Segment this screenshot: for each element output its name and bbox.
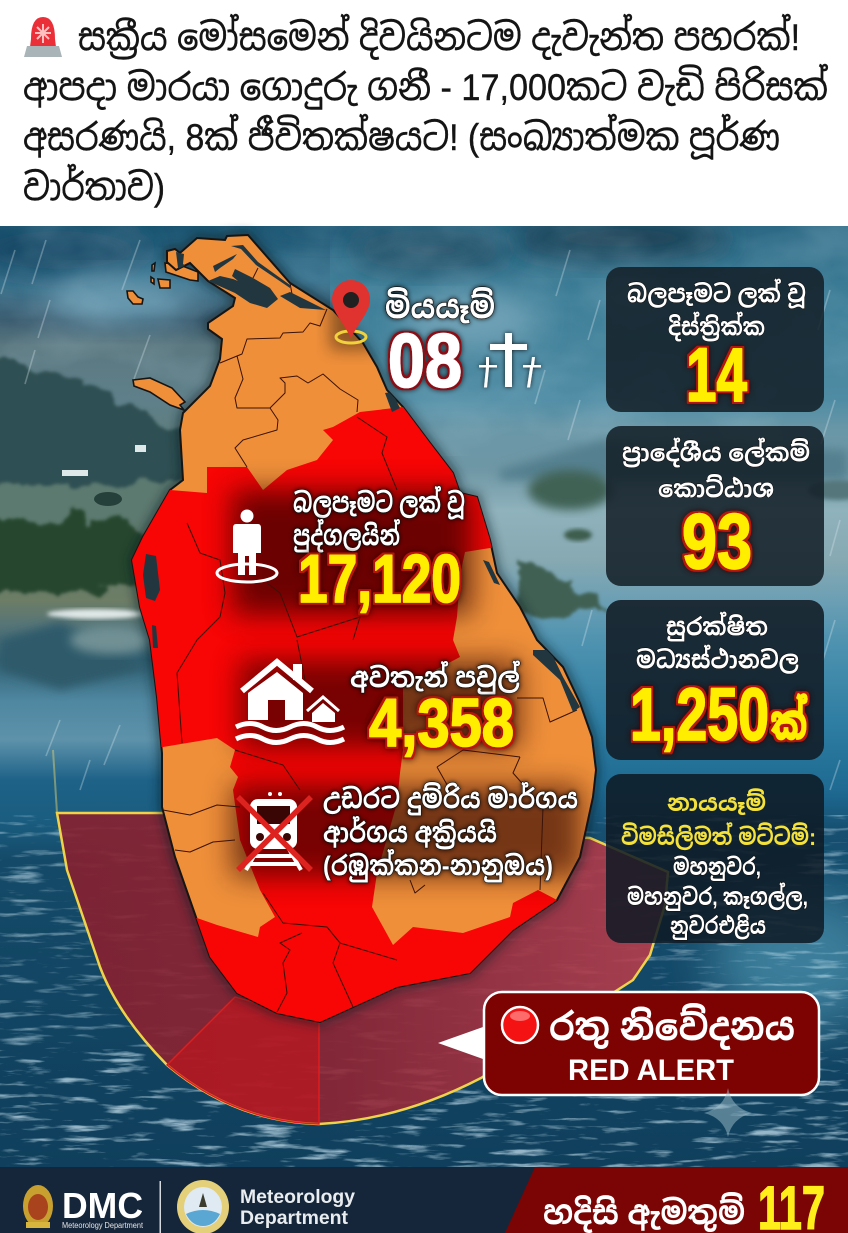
- footer bar: [0, 1167, 848, 1233]
- panel: landslide warning: නුවරඑළිය: [670, 913, 766, 940]
- island base: [132, 235, 596, 1022]
- footer red section: [505, 1167, 848, 1233]
- outlying islands and Mannar spit: [127, 263, 198, 410]
- storm background photo: [0, 216, 848, 1167]
- map shadow: [132, 235, 596, 1022]
- footer bar: Department: [240, 1208, 349, 1229]
- emergency label: හදිසි ඇමතුම්: [543, 1191, 745, 1233]
- icon: crosses: [479, 333, 541, 388]
- trees left: [0, 505, 144, 600]
- panel: landslide warning: [606, 774, 824, 943]
- panel number: 14: [686, 333, 747, 418]
- map of Sri Lanka: [126, 224, 606, 1032]
- warning districts: මහනුවර,: [673, 854, 761, 881]
- icon: location pin: [332, 280, 370, 343]
- callout heading: රතු නිවේදනය: [549, 1002, 795, 1050]
- headline: වාර්තාව): [23, 163, 165, 208]
- DMC wordmark: DMC: [62, 1185, 143, 1226]
- panel: landslide warning: විමසිලිමත් මට්ටම්:: [621, 822, 816, 850]
- affected people label: බලපෑමට ලක් වූ: [293, 485, 465, 519]
- headline: අසරණයි, 8ක් ජීවිතක්ෂයට! (සංඛ්‍යාත්මක පූර්ණ: [23, 113, 780, 160]
- highlighted sector: [167, 997, 319, 1124]
- headline: [23, 13, 829, 208]
- affected people group: පුද්ගලයින්: [293, 518, 400, 552]
- panel: divisional secretariats: කොට්ඨාශ: [658, 473, 774, 503]
- icon: siren: [24, 17, 62, 57]
- lagoons: [143, 245, 580, 712]
- deaths group: [332, 280, 541, 404]
- affected people number: 17,120: [298, 541, 461, 617]
- sea waves: [0, 815, 848, 1167]
- displaced families group: [236, 660, 521, 761]
- warning heading: නායයෑම්: [667, 788, 766, 816]
- panel number: 1,250: [630, 673, 769, 756]
- panel: safe centres: [606, 600, 824, 760]
- Meteorology Department wordmark: Meteorology: [240, 1187, 355, 1208]
- logo: DMC emblem: [23, 1185, 53, 1228]
- logo: Meteorology seal: [177, 1180, 229, 1233]
- icon: flooded house: [236, 662, 344, 742]
- callout subheading: RED ALERT: [568, 1054, 734, 1087]
- displaced families label: අවතැන් පවුල්: [350, 660, 521, 694]
- panel heading: ප්‍රාදේශීය ලේකම්: [622, 437, 810, 467]
- deaths label: මියයෑම්: [385, 286, 495, 325]
- rail line text: උඩරට දුම්රිය මාර්ගය: [323, 781, 578, 815]
- panel: safe centres: මධ්‍යස්ථානවල: [636, 644, 799, 674]
- rail line group: (රඹුක්කන-නානුඔය): [323, 848, 553, 882]
- panel: affected districts: දිස්ත්‍රික්ක: [668, 311, 765, 341]
- panel: affected districts: [606, 267, 824, 418]
- rail line group: ආර්ගය අක්‍රියයි: [323, 815, 497, 849]
- red districts: [100, 245, 640, 1060]
- deaths number: 08: [388, 319, 462, 404]
- rail line group: [238, 781, 578, 882]
- district borders: [163, 268, 577, 1012]
- panel: landslide warning: මහනුවර, කෑගල්ල,: [627, 882, 808, 911]
- panel heading: බලපෑමට ලක් වූ: [627, 278, 806, 308]
- hills right: [500, 440, 848, 480]
- headline: සක්‍රීය මෝසමෙන් දිවයිනටම දැවැන්ත පහරක්!: [78, 13, 800, 60]
- affected people group: [217, 485, 465, 617]
- icon: crossed out train: [238, 792, 311, 870]
- panel number: ක්: [771, 693, 808, 749]
- panel heading: සුරක්ෂිත: [666, 611, 768, 641]
- panel number: 93: [682, 497, 752, 585]
- icon: person on ring: [217, 510, 277, 582]
- sparkle: [704, 1088, 752, 1137]
- hills left: [0, 358, 210, 486]
- displaced families number: 4,358: [369, 685, 514, 761]
- callout: red alert: [438, 992, 819, 1095]
- icon: red dot: [502, 1007, 538, 1043]
- dark glow behind labels: [232, 490, 472, 615]
- panel: divisional secretariats: [606, 426, 824, 586]
- alert zone buffer around south coast: [53, 750, 668, 1124]
- footer bar: Meteorology Department: [62, 1221, 144, 1230]
